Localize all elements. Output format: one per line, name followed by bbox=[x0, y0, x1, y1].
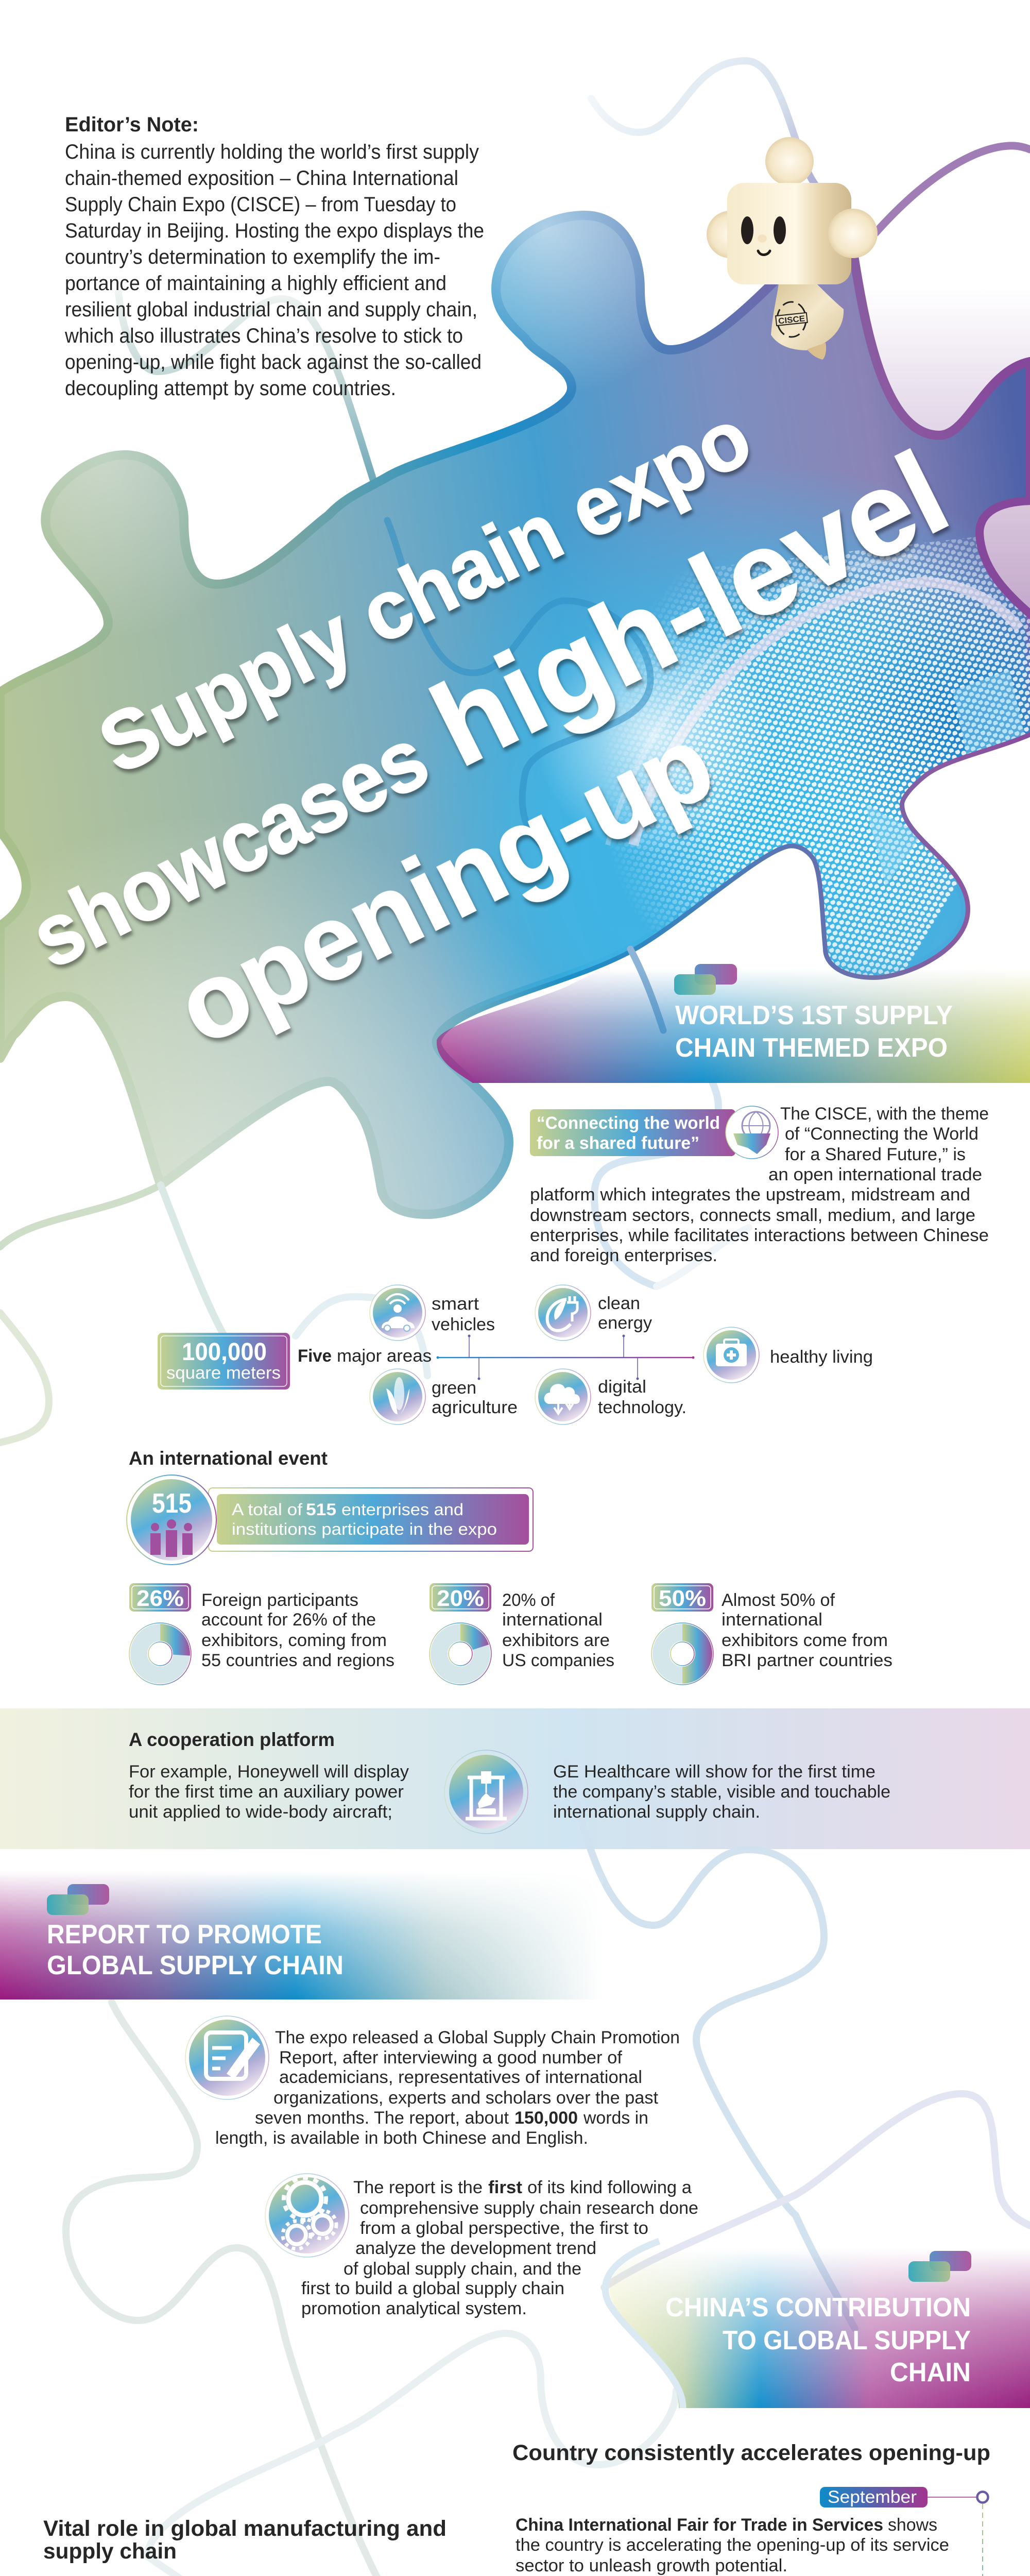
lavender lobe at hero right edge bbox=[980, 501, 1030, 618]
panel: a cooperation platform: GE Healthcare will show for the first time bbox=[553, 1762, 876, 1782]
stat: 20% US companies: 20% bbox=[437, 1586, 484, 1611]
icon: chat squares bbox=[908, 2251, 971, 2282]
stat: 100,000 square meters: 100,000 bbox=[182, 1338, 267, 1366]
heading: vital role bbox=[43, 2516, 447, 2564]
hero puzzle shape bbox=[0, 215, 1030, 1214]
stat: 26% foreign participants: Foreign participants bbox=[201, 1590, 358, 1610]
stat: 26% foreign participants: 55 countries and regions bbox=[201, 1651, 394, 1670]
mascot cube head bbox=[727, 183, 851, 284]
mascot logo: CISCE bbox=[778, 314, 805, 326]
text: global supply chain promotion report: The expo released a Global Supply Chain Promotion bbox=[275, 2028, 680, 2047]
banner heading bbox=[675, 1001, 953, 1063]
banner: world's 1st supply chain themed expo bbox=[437, 964, 1030, 1083]
chart: donut 20% bbox=[430, 1623, 491, 1685]
icon: chat squares bbox=[674, 964, 737, 995]
text: about the CISCE bbox=[530, 1104, 989, 1265]
banner heading: CHINA’S CONTRIBUTION bbox=[665, 2293, 971, 2323]
icon: digital technology bbox=[535, 1369, 591, 1425]
hero inner waves bbox=[387, 520, 663, 1030]
panel: a cooperation platform: A cooperation platform bbox=[129, 1729, 335, 1750]
heading: vital role: Vital role in global manufacturing and bbox=[43, 2516, 447, 2541]
text: about the CISCE: and foreign enterprises. bbox=[530, 1246, 717, 1265]
text: about the CISCE: downstream sectors, connects small, medium, and large bbox=[530, 1206, 975, 1225]
timeline rail bbox=[982, 2504, 983, 2576]
timeline: September: sector to unleash growth potential. bbox=[516, 2556, 787, 2575]
stat: 515 enterprises bbox=[127, 1475, 533, 1565]
heading: an international event: An international event bbox=[129, 1448, 328, 1469]
text: first of its kind: of global supply chain, and the bbox=[344, 2259, 581, 2279]
labels for the five areas: technology. bbox=[598, 1398, 686, 1417]
editor's note: which also illustrates China’s resolve to stick to bbox=[64, 325, 463, 347]
banner heading: CHAIN bbox=[890, 2358, 971, 2387]
banner heading bbox=[665, 2293, 971, 2387]
stat: 26% foreign participants: exhibitors, coming from bbox=[201, 1631, 387, 1650]
text: about the CISCE: an open international trade bbox=[768, 1165, 982, 1184]
background lines around the lower hero bbox=[0, 1083, 749, 1443]
text: global supply chain promotion report: Report, after interviewing a good number of bbox=[279, 2048, 623, 2067]
title: showcases bbox=[16, 709, 442, 986]
stat: 26% foreign participants bbox=[129, 1583, 394, 1685]
icon: 3D printer bbox=[444, 1750, 528, 1834]
panel: a cooperation platform: unit applied to wide-body aircraft; bbox=[129, 1802, 392, 1822]
mascot cone bbox=[771, 283, 844, 360]
editor's note: resilient global industrial chain and supply chain, bbox=[65, 298, 477, 321]
theme pill: for a shared future” bbox=[537, 1133, 699, 1153]
stat: 20% US companies: international bbox=[502, 1610, 603, 1630]
text: global supply chain promotion report: words in bbox=[583, 2108, 648, 2128]
stat: 100,000 square meters: square meters bbox=[166, 1363, 281, 1383]
labels for the five areas: vehicles bbox=[432, 1315, 495, 1334]
background wave: line behind editor note bbox=[118, 293, 387, 520]
title: high-level bbox=[413, 427, 967, 791]
text: about the CISCE: of “Connecting the World bbox=[785, 1124, 978, 1144]
labels for the five areas: green bbox=[432, 1378, 476, 1398]
labels for the five areas: digital bbox=[598, 1377, 646, 1397]
text: first of its kind bbox=[301, 2178, 698, 2318]
stat: 20% US companies bbox=[430, 1583, 614, 1685]
stat: 100,000 square meters bbox=[158, 1333, 290, 1389]
editor's note: decoupling attempt by some countries. bbox=[65, 377, 396, 400]
text: about the CISCE: for a Shared Future,” is bbox=[785, 1145, 966, 1164]
stat: 515 enterprises: 515 bbox=[306, 1500, 336, 1519]
stat: 50% BRI partner countries bbox=[651, 1583, 892, 1685]
stat: 515 enterprises: enterprises and bbox=[341, 1500, 464, 1519]
icon: gears in circle bbox=[265, 2174, 349, 2257]
labels for the five areas: clean bbox=[598, 1294, 640, 1313]
editor's note: China is currently holding the world’s first supply bbox=[65, 141, 479, 163]
icon: healthy living bbox=[703, 1327, 759, 1383]
chart: donut 26% bbox=[129, 1623, 191, 1685]
theme pill: “Connecting the world bbox=[537, 1113, 720, 1133]
stat: 515 enterprises: A total of bbox=[232, 1500, 302, 1519]
stat: 20% US companies: US companies bbox=[502, 1651, 614, 1670]
banner heading: CHAIN THEMED EXPO bbox=[675, 1033, 948, 1063]
icon: smart vehicles bbox=[370, 1285, 425, 1341]
text: about the CISCE: enterprises, while facilitates interactions between Chinese bbox=[530, 1226, 989, 1245]
text: global supply chain promotion report: organizations, experts and scholars over the past bbox=[273, 2088, 659, 2108]
text: global supply chain promotion report: length, is available in both Chinese and English. bbox=[215, 2128, 588, 2148]
icon: globe with crowd bbox=[726, 1106, 778, 1159]
text: first of its kind: promotion analytical system. bbox=[301, 2299, 527, 2318]
stat: 515 enterprises: 515 bbox=[152, 1488, 192, 1519]
timeline: September: shows bbox=[888, 2515, 937, 2535]
icon: chat squares bbox=[47, 1884, 109, 1915]
soft white fades over the hero bbox=[0, 206, 716, 1257]
panel: a cooperation platform: the company’s stable, visible and touchable bbox=[553, 1782, 890, 1802]
text: first of its kind: analyze the development trend bbox=[355, 2239, 596, 2258]
heading: vital role: supply chain bbox=[43, 2539, 177, 2564]
text: five major areas bbox=[298, 1346, 432, 1366]
labels for the five areas: healthy living bbox=[770, 1347, 873, 1367]
theme pill bbox=[530, 1109, 735, 1156]
editor's note: Saturday in Beijing. Hosting the expo displays the bbox=[65, 219, 484, 242]
panel: a cooperation platform: for the first time an auxiliary power bbox=[129, 1782, 404, 1802]
text: global supply chain promotion report: 150,000 bbox=[514, 2108, 578, 2128]
banner heading: REPORT TO PROMOTE bbox=[47, 1920, 322, 1950]
timeline: September: China International Fair for Trade in Services bbox=[516, 2515, 883, 2535]
background lines in the middle section bbox=[66, 1762, 1030, 2576]
text: first of its kind: first bbox=[488, 2178, 522, 2197]
labels for the five areas bbox=[432, 1294, 873, 1417]
chart: donut 50% bbox=[651, 1623, 713, 1685]
icon: green agriculture bbox=[370, 1369, 425, 1425]
text: about the CISCE: The CISCE, with the theme bbox=[780, 1104, 989, 1124]
icon: report document bbox=[185, 2016, 269, 2099]
stat: 20% US companies: 20% of bbox=[502, 1590, 555, 1610]
title bbox=[16, 390, 967, 1067]
timeline connector for five areas bbox=[437, 1334, 694, 1380]
text: first of its kind: of its kind following a bbox=[527, 2178, 692, 2197]
editor's note bbox=[64, 113, 484, 400]
banner heading bbox=[47, 1920, 344, 1980]
stat: 50% BRI partner countries: exhibitors come from bbox=[722, 1631, 888, 1650]
text: five major areas: major areas bbox=[337, 1346, 432, 1366]
stat: 50% BRI partner countries: 50% bbox=[659, 1586, 706, 1611]
stat: 515 enterprises: institutions participate in the expo bbox=[232, 1520, 497, 1538]
text: about the CISCE: platform which integrates the upstream, midstream and bbox=[530, 1185, 970, 1205]
stat: 26% foreign participants: account for 26% of the bbox=[201, 1610, 376, 1630]
banner: China's contribution to global supply chain bbox=[605, 2241, 1030, 2408]
background wave: upper right lines bbox=[591, 61, 1030, 435]
text: global supply chain promotion report: seven months. The report, about bbox=[255, 2108, 509, 2128]
labels for the five areas: agriculture bbox=[432, 1398, 518, 1417]
banner: report to promote global supply chain bbox=[0, 1871, 603, 1999]
heading: country consistently accelerates opening-up: Country consistently accelerates opening-up bbox=[512, 2441, 990, 2465]
editor's note: Supply Chain Expo (CISCE) – from Tuesday to bbox=[65, 193, 456, 216]
editor's note: chain-themed exposition – China International bbox=[65, 167, 458, 190]
mascot logo bbox=[776, 302, 808, 337]
title: Supply chain expo bbox=[85, 390, 765, 791]
stat: 50% BRI partner countries: BRI partner countries bbox=[722, 1651, 892, 1670]
banner heading: TO GLOBAL SUPPLY bbox=[723, 2326, 971, 2355]
panel: a cooperation platform: For example, Honeywell will display bbox=[129, 1762, 409, 1782]
stat: 26% foreign participants: 26% bbox=[136, 1586, 184, 1611]
stat: 20% US companies: exhibitors are bbox=[502, 1631, 610, 1650]
editor's note: portance of maintaining a highly efficient and bbox=[65, 272, 447, 295]
editor's note: Editor’s Note: bbox=[65, 113, 199, 136]
panel: a cooperation platform bbox=[129, 1729, 890, 1834]
mascot bbox=[707, 137, 878, 360]
timeline: September: September bbox=[828, 2487, 917, 2507]
globe: halftone world sphere bbox=[430, 485, 1030, 1006]
cooperation band background bbox=[0, 1708, 1030, 1849]
text: first of its kind: first to build a global supply chain bbox=[301, 2279, 564, 2298]
panel: a cooperation platform: international supply chain. bbox=[553, 1802, 760, 1822]
text: first of its kind: from a global perspective, the first to bbox=[360, 2218, 648, 2238]
banner heading: WORLD’S 1ST SUPPLY bbox=[675, 1001, 953, 1030]
timeline: September: the country is accelerating the opening-up of its service bbox=[516, 2535, 949, 2555]
text: global supply chain promotion report bbox=[215, 2028, 680, 2148]
stat: 50% BRI partner countries: international bbox=[722, 1610, 822, 1630]
stat: 50% BRI partner countries: Almost 50% of bbox=[722, 1590, 835, 1610]
labels for the five areas: smart bbox=[432, 1294, 479, 1314]
text: five major areas: Five bbox=[298, 1346, 332, 1366]
timeline: September bbox=[516, 2487, 988, 2575]
editor's note: opening-up, while fight back against the so-called bbox=[65, 351, 482, 374]
text: first of its kind: comprehensive supply chain research done bbox=[360, 2198, 698, 2218]
title: opening-up bbox=[159, 703, 730, 1067]
labels for the five areas: energy bbox=[598, 1313, 652, 1333]
text: first of its kind: The report is the bbox=[353, 2178, 483, 2197]
banner heading: GLOBAL SUPPLY CHAIN bbox=[47, 1951, 344, 1980]
icon: people bbox=[150, 1519, 193, 1557]
text: global supply chain promotion report: academicians, representatives of international bbox=[279, 2067, 642, 2087]
editor's note: country’s determination to exemplify the im- bbox=[65, 246, 440, 268]
icon: clean energy bbox=[535, 1285, 591, 1341]
